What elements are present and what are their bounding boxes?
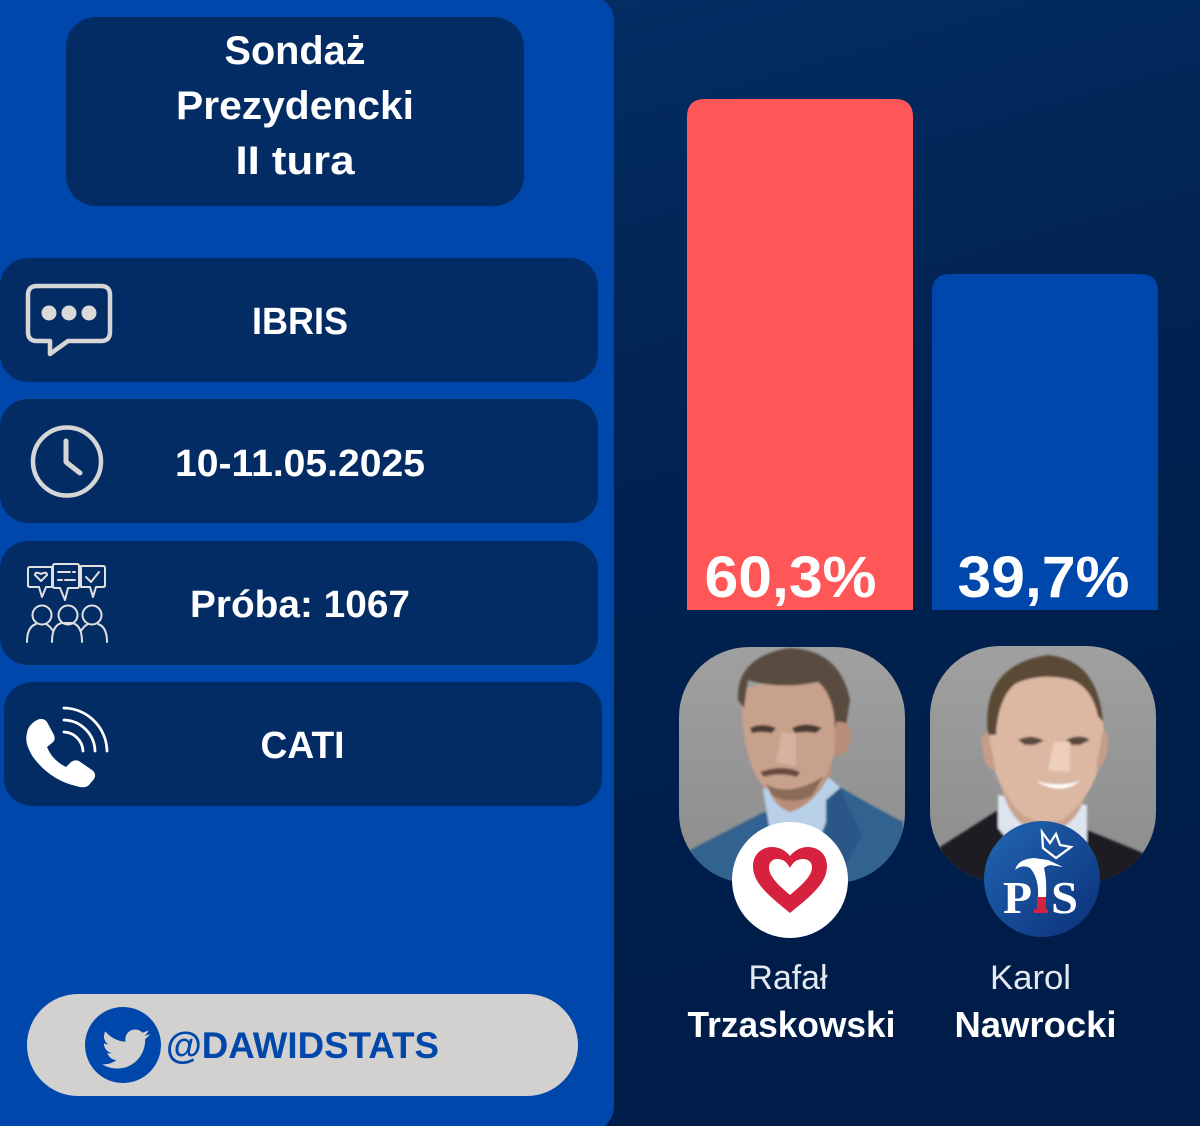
candidate: Rafał Trzaskowski [679, 647, 905, 1045]
bar: Trzaskowski [687, 99, 913, 610]
row: method [4, 682, 602, 806]
bar: Nawrocki: 39,7% [958, 545, 1130, 610]
text: name: Karol [990, 959, 1071, 997]
icon: clock [33, 428, 101, 496]
text: date: 10-11.05.2025 [175, 443, 425, 485]
text: handle: @DAWIDSTATS [166, 1025, 439, 1066]
bar chart [687, 99, 1158, 610]
row: date [0, 399, 598, 523]
row: pollster [0, 258, 598, 382]
logo: PiS: P [1003, 872, 1032, 923]
heading: poll title [66, 17, 524, 206]
text: name: Trzaskowski [688, 1004, 896, 1045]
portrait: Nawrocki [930, 646, 1156, 890]
row: sample [0, 541, 598, 665]
text: name: Nawrocki [954, 1004, 1116, 1045]
logo: heart [732, 822, 848, 938]
text: sample size: Próba: 1067 [190, 584, 410, 626]
logo: PiS [984, 821, 1100, 937]
icon: twitter bird [85, 1007, 161, 1083]
bar: Trzaskowski: 60,3% [704, 545, 876, 610]
text: name [688, 959, 896, 1045]
portrait: Trzaskowski [679, 647, 905, 890]
icon: phone with signal [26, 708, 107, 787]
panel: poll details [0, 0, 614, 1126]
heading: poll title: Sondaż [224, 29, 366, 73]
icon: people with speech bubbles [27, 564, 107, 642]
candidate: Karol Nawrocki [930, 646, 1156, 1045]
text: IBRIS: IBRIS [252, 301, 348, 343]
social handle [27, 994, 578, 1096]
heading: poll title: Prezydencki [176, 84, 414, 128]
logo: PiS: S [1051, 872, 1078, 923]
heading: poll title: II tura [236, 139, 355, 183]
text: name: Rafał [748, 959, 828, 997]
icon: speech bubble [28, 286, 110, 354]
bar: Nawrocki [932, 274, 1158, 610]
text: name [954, 959, 1116, 1045]
text: CATI: CATI [260, 725, 344, 767]
